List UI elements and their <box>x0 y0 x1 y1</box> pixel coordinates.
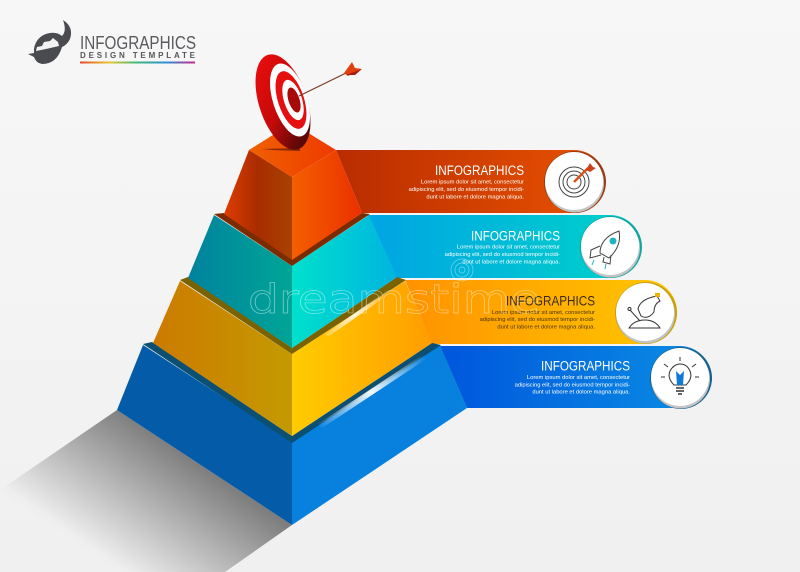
text block: orange band: dunt ut labore et dolore magna aliqua. <box>497 324 595 330</box>
panel: red band <box>336 150 606 213</box>
text block: teal band: Lorem ipsum dolor sit amet, consectetur <box>457 244 560 250</box>
heading: blue band: INFOGRAPHICS <box>541 358 630 374</box>
icon badge: rocket <box>580 216 642 278</box>
pyramid tier: red <box>224 123 362 260</box>
text block: blue band: adipiscing elit, sed do eiusmod tempor incidi- <box>515 382 630 388</box>
text block: teal band: adipiscing elit, sed do eiusmod tempor incidi- <box>445 252 560 258</box>
rainbow rule <box>80 62 195 64</box>
heading: red band: INFOGRAPHICS <box>435 163 524 178</box>
icon: target with arrow <box>245 48 362 156</box>
text block: red band: Lorem ipsum dolor sit amet, consectetur <box>421 180 524 186</box>
pyramid shadow <box>0 410 292 572</box>
text block: orange band: Lorem ipsum dolor sit amet, consectetur <box>492 310 595 316</box>
logo subtitle: DESIGN TEMPLATE <box>80 51 196 60</box>
panel: blue band <box>440 346 711 408</box>
pyramid tier: teal <box>188 213 397 348</box>
icon badge: target <box>544 151 606 213</box>
text block: blue band: Lorem ipsum dolor sit amet, consectetur <box>527 375 630 381</box>
heading: teal band: INFOGRAPHICS <box>471 228 560 244</box>
pyramid tier: blue <box>117 342 467 525</box>
watermark <box>248 259 540 323</box>
text block: teal band: dunt ut labore et dolore magna aliqua. <box>462 260 560 266</box>
icon badge: lightbulb <box>650 347 712 409</box>
logo title: INFOGRAPHICS <box>80 33 196 53</box>
panel: teal band <box>367 215 642 278</box>
pyramid tier: yellow <box>153 277 432 436</box>
icon badge: microscope <box>615 282 677 344</box>
text block: orange band: adipiscing elit, sed do eiusmod tempor incidi- <box>480 317 595 323</box>
logo <box>28 20 196 64</box>
panel: orange band <box>405 280 677 344</box>
text block: red band: adipiscing elit, sed do eiusmod tempor incidi- <box>409 187 524 193</box>
icon: logo mark <box>28 20 71 64</box>
text block: red band: dunt ut labore et dolore magna aliqua. <box>426 194 524 200</box>
text block: blue band: dunt ut labore et dolore magna aliqua. <box>532 390 630 396</box>
arrow <box>299 62 362 96</box>
heading: orange band: INFOGRAPHICS <box>506 294 595 308</box>
watermark: dreamstime <box>248 277 540 323</box>
